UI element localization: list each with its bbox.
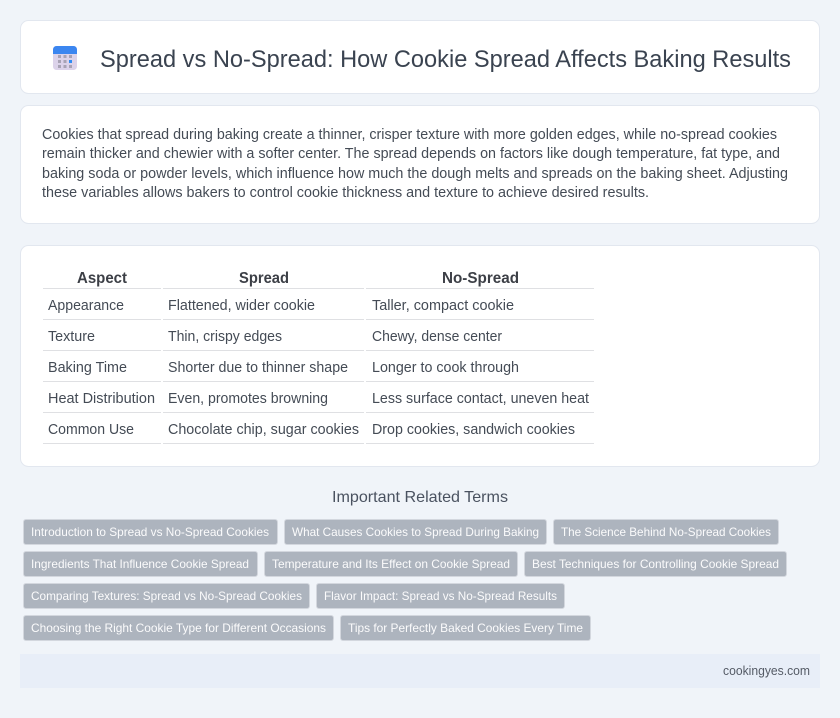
row: common use: Common Use bbox=[48, 422, 134, 438]
related term tags: Comparing Textures: Spread vs No-Spread Cookies bbox=[31, 589, 302, 603]
row: appearance: Taller, compact cookie bbox=[372, 298, 514, 314]
panel: intro paragraph: Cookies that spread during baking create a thinner, crisper texture with more golden edges, while no-spread cookies bbox=[42, 127, 777, 143]
row: baking time: Longer to cook through bbox=[372, 360, 519, 376]
row: baking time: Baking Time bbox=[48, 360, 127, 376]
row: baking time bbox=[48, 360, 519, 376]
panel: intro paragraph: baking soda or powder levels, which influence how much the dough melts and spreads on the baking sheet. Adjusting bbox=[42, 166, 788, 182]
panel: intro paragraph: remain thicker and chewier with a softer center. The spread depends on factors like dough temperature, fat type, and bbox=[42, 146, 780, 162]
table header bbox=[77, 270, 519, 287]
row: texture: Chewy, dense center bbox=[372, 329, 502, 345]
row: texture: Thin, crispy edges bbox=[168, 329, 282, 345]
related term tags: The Science Behind No-Spread Cookies bbox=[561, 525, 771, 539]
row: appearance bbox=[48, 298, 514, 314]
related term tags: Choosing the Right Cookie Type for Different Occasions bbox=[31, 621, 326, 635]
row: texture bbox=[48, 329, 502, 345]
row: heat distribution bbox=[48, 391, 589, 407]
related term tags: Ingredients That Influence Cookie Spread bbox=[31, 557, 249, 571]
row: heat distribution: Heat Distribution bbox=[48, 391, 155, 407]
panel: intro paragraph bbox=[20, 106, 820, 224]
panel: comparison table bbox=[20, 246, 820, 466]
row: common use: Chocolate chip, sugar cookies bbox=[168, 422, 359, 438]
heading: related terms: Important Related Terms bbox=[332, 489, 508, 506]
panel: title card bbox=[20, 20, 820, 94]
row: texture: Texture bbox=[48, 329, 95, 345]
row: heat distribution: Even, promotes browning bbox=[168, 391, 328, 407]
related term tags: What Causes Cookies to Spread During Baking bbox=[292, 525, 539, 539]
panel: intro paragraph: these variables allows bakers to control cookie thickness and texture to achieve desired results. bbox=[42, 185, 649, 201]
related term tags: Introduction to Spread vs No-Spread Cookies bbox=[31, 525, 269, 539]
table header: No-Spread bbox=[442, 270, 519, 287]
row: heat distribution: Less surface contact, uneven heat bbox=[372, 391, 589, 407]
footer bbox=[20, 654, 820, 688]
related term tags: Tips for Perfectly Baked Cookies Every Time bbox=[348, 621, 583, 635]
table header: Aspect bbox=[77, 270, 127, 287]
related term tags: Best Techniques for Controlling Cookie Spread bbox=[532, 557, 779, 571]
related term tags: Flavor Impact: Spread vs No-Spread Results bbox=[324, 589, 557, 603]
icon: calendar bbox=[53, 46, 77, 70]
row: common use: Drop cookies, sandwich cookies bbox=[372, 422, 575, 438]
row: appearance: Appearance bbox=[48, 298, 124, 314]
footer: cookingyes.com bbox=[723, 664, 810, 678]
row: appearance: Flattened, wider cookie bbox=[168, 298, 315, 314]
title: Spread vs No-Spread: How Cookie Spread Affects Baking Results bbox=[100, 46, 791, 73]
table header: Spread bbox=[239, 270, 289, 287]
related term tags: Temperature and Its Effect on Cookie Spread bbox=[272, 557, 510, 571]
related term tags bbox=[24, 520, 786, 640]
row: baking time: Shorter due to thinner shape bbox=[168, 360, 348, 376]
row: common use bbox=[48, 422, 575, 438]
